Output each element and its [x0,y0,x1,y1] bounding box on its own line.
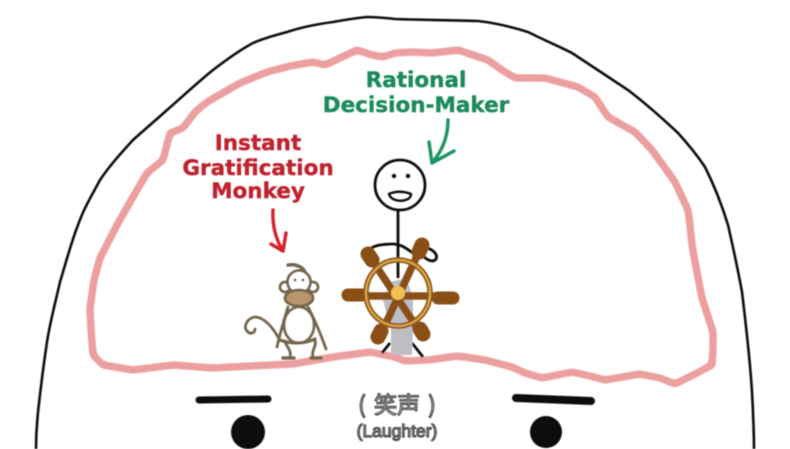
ship wheel [348,245,455,355]
brain outline [90,50,713,384]
left eyebrow [199,399,268,400]
label: Rational Decision-Maker [323,68,510,118]
arrow: green [429,120,454,163]
label: Rational Decision-Maker: Decision-Maker [323,93,510,118]
subtitle: English: (Laughter) [357,421,437,441]
left eye [231,415,265,449]
label: Instant Gratification Monkey: Instant [215,131,301,156]
label: Instant Gratification Monkey: Gratification [182,156,334,181]
label: Instant Gratification Monkey: Monkey [211,179,305,204]
monkey [245,265,326,358]
subtitle: Chinese: ( 笑声 ) [358,386,436,420]
label: Instant Gratification Monkey [182,131,334,204]
right eye [530,416,562,448]
right eyebrow [516,398,591,401]
stick figure [363,160,437,357]
label: Rational Decision-Maker: Rational [366,68,466,93]
arrow: red [271,210,286,251]
